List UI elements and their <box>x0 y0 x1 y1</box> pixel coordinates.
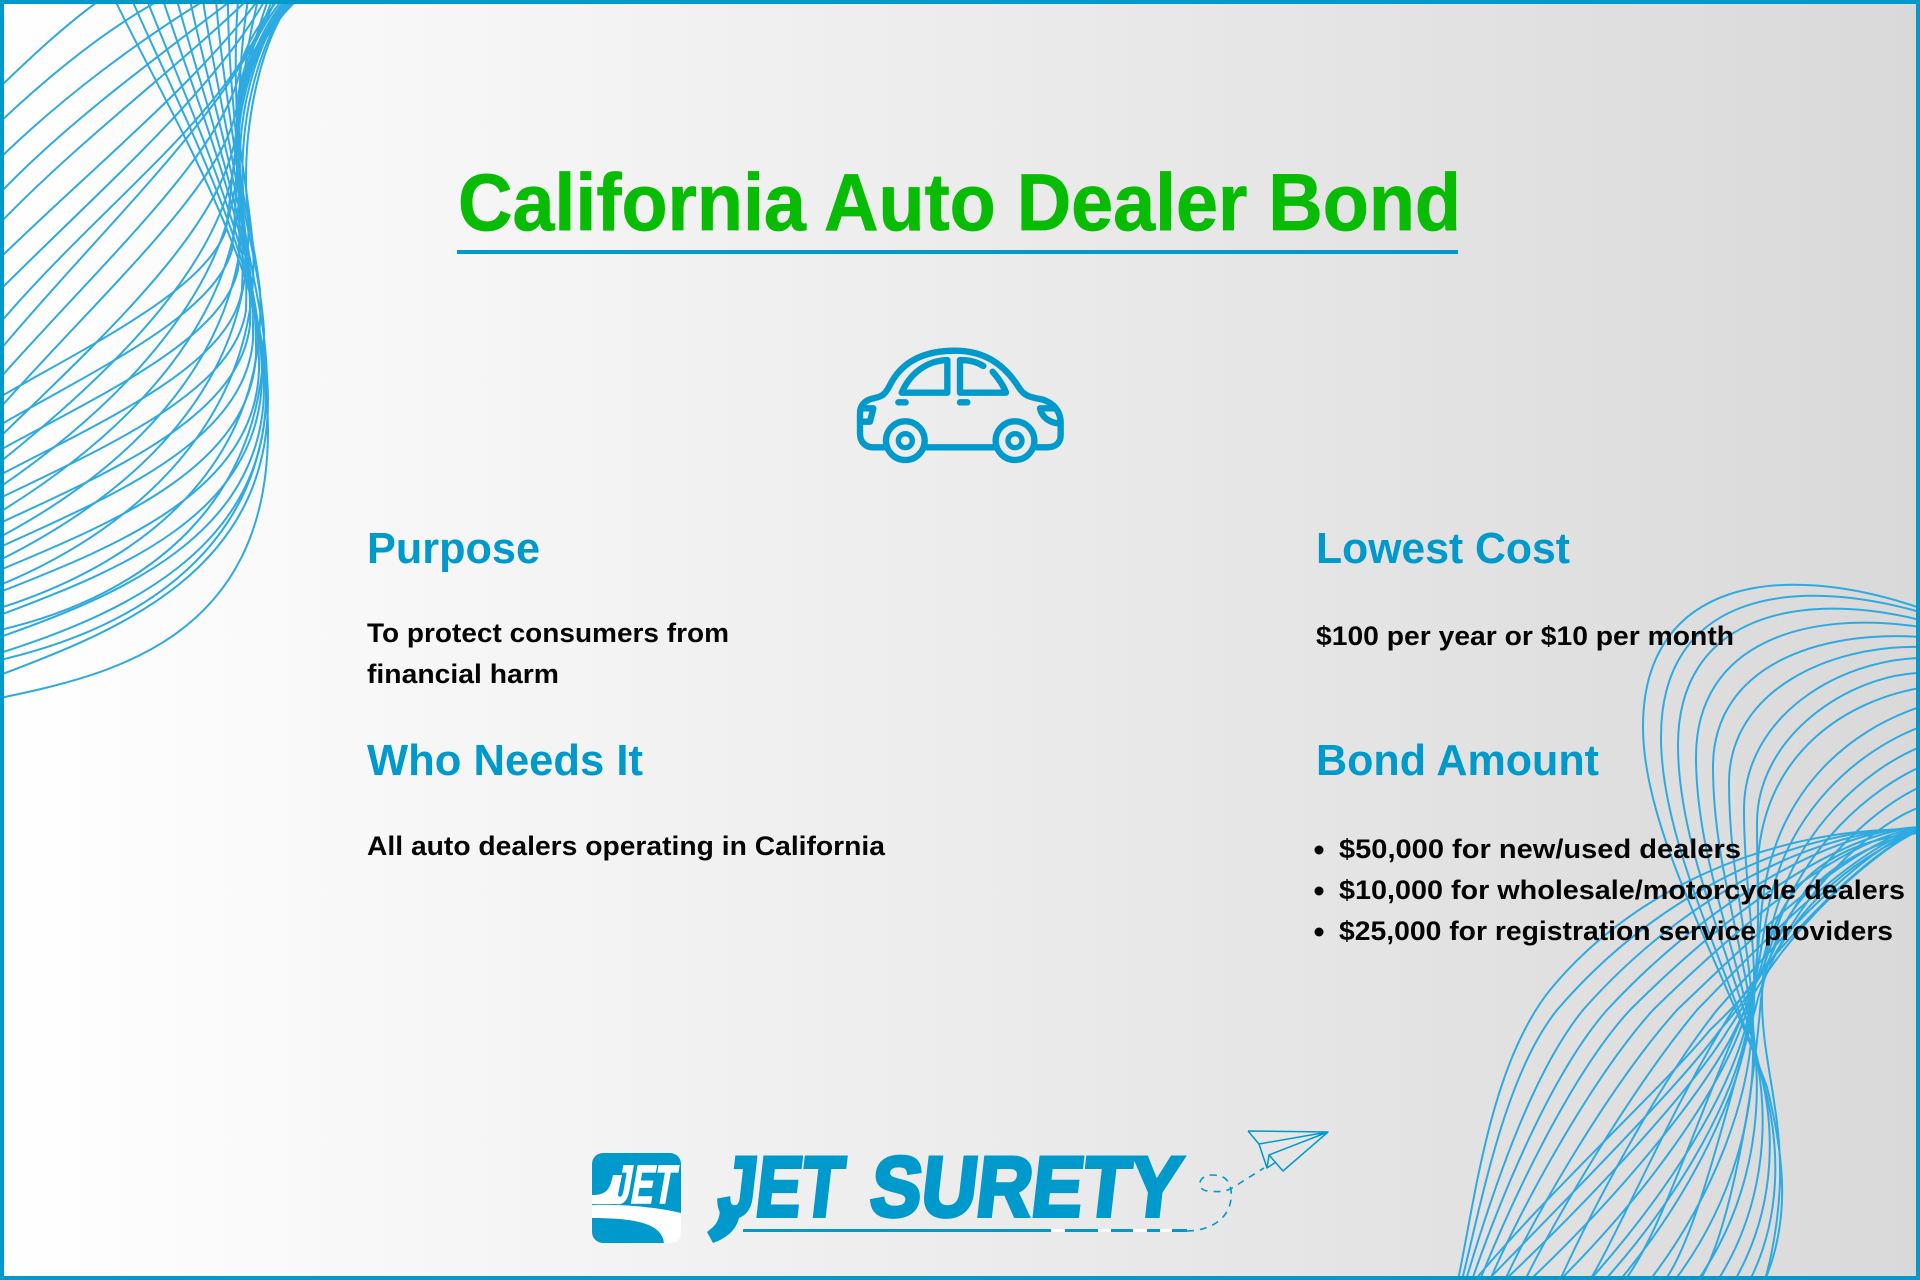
icon: logo badge: JET <box>608 1154 682 1215</box>
panel: lowest cost: Lowest Cost <box>1316 524 1570 573</box>
panel: bond amount: $50,000 for new/used dealers <box>1339 834 1741 864</box>
panel: who needs it: All auto dealers operating in California <box>367 831 886 861</box>
panel: bond amount: $10,000 for wholesale/motorcycle dealers <box>1339 875 1905 905</box>
logo wordmark <box>707 1140 1187 1243</box>
icon: paper plane <box>1248 1131 1328 1171</box>
panel: who needs it: Who Needs It <box>367 736 643 785</box>
panel: purpose: Purpose <box>367 524 540 573</box>
panel: bond amount <box>1314 736 1905 946</box>
panel: lowest cost <box>1316 524 1734 651</box>
panel: lowest cost: $100 per year or $10 per month <box>1316 621 1734 651</box>
icon: dashed flight path <box>1187 1168 1264 1231</box>
panel: purpose <box>367 524 729 689</box>
icon: logo badge <box>592 1153 682 1243</box>
logo wordmark: JET <box>714 1140 849 1235</box>
panel: bond amount: Bond Amount <box>1316 736 1599 785</box>
logo: jet surety <box>592 1131 1328 1243</box>
icon: car <box>860 351 1061 460</box>
wave: top left <box>0 0 297 698</box>
panel: purpose: To protect consumers from <box>367 618 729 648</box>
panel: bond amount: $25,000 for registration service providers <box>1339 916 1893 946</box>
logo wordmark: SURETY <box>866 1140 1187 1235</box>
panel: who needs it <box>367 736 886 861</box>
wave: bottom right <box>1458 585 1920 1280</box>
title: California Auto Dealer Bond <box>458 158 1461 248</box>
panel: purpose: financial harm <box>367 659 559 689</box>
